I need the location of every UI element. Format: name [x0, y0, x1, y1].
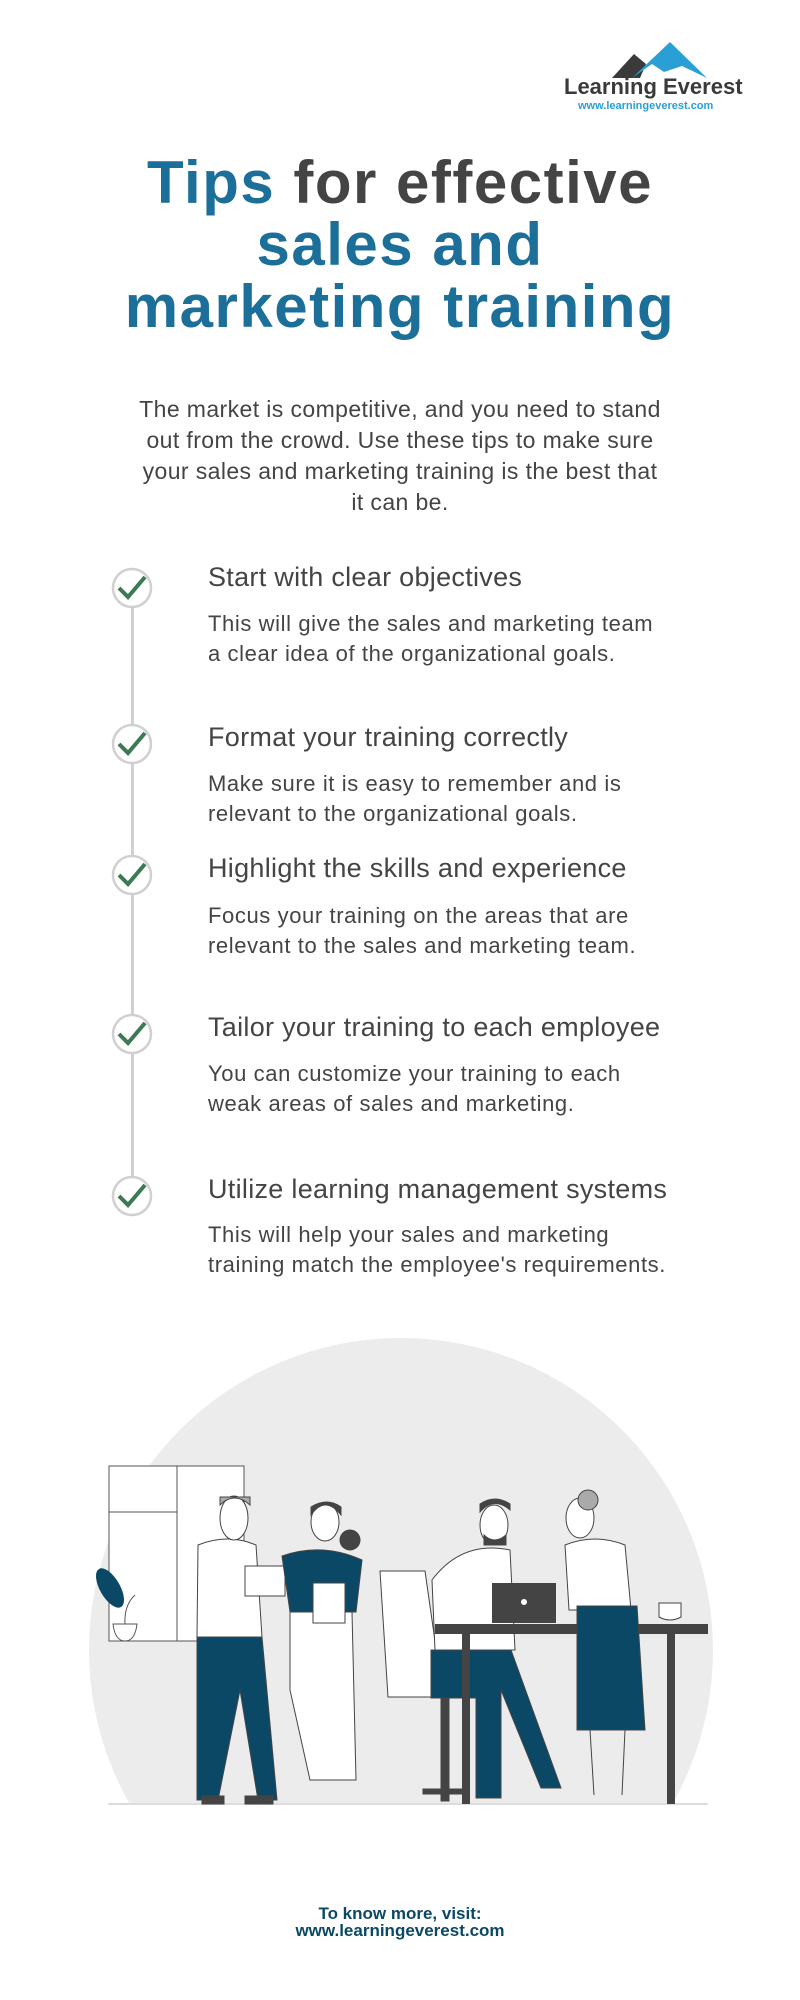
intro text — [139, 396, 661, 515]
description — [208, 903, 636, 958]
woman 2 — [565, 1490, 681, 1795]
timeline line — [131, 608, 134, 1178]
desk and laptop — [435, 1583, 708, 1804]
icon: check — [112, 724, 152, 764]
logo url: www.learningeverest.com — [578, 100, 713, 112]
description — [208, 771, 621, 826]
title — [125, 149, 675, 340]
heading: Start with clear objectives — [208, 562, 522, 592]
tip 5 — [112, 1174, 667, 1277]
plant — [90, 1564, 137, 1641]
description: Make sure it is easy to remember and is — [208, 771, 621, 796]
description — [208, 1222, 666, 1277]
description: weak areas of sales and marketing. — [208, 1091, 574, 1116]
description — [208, 611, 653, 666]
icon: check — [112, 1014, 152, 1054]
tip 3 — [112, 853, 636, 958]
illustration: office team — [89, 1338, 713, 1805]
background circle — [89, 1338, 713, 1803]
icon: check — [112, 1176, 152, 1216]
description: This will help your sales and marketing — [208, 1222, 609, 1247]
description: relevant to the organizational goals. — [208, 801, 578, 826]
tip 4 — [112, 1012, 660, 1116]
footer — [295, 1904, 505, 1940]
description: relevant to the sales and marketing team. — [208, 933, 636, 958]
intro text: it can be. — [351, 489, 449, 515]
heading: Tailor your training to each employee — [208, 1012, 660, 1042]
man 1 — [197, 1496, 285, 1804]
man 2 seated — [431, 1499, 561, 1798]
title: marketing training — [125, 273, 675, 340]
intro text: your sales and marketing training is the best that — [143, 458, 657, 484]
icon: check — [112, 854, 152, 896]
description: training match the employee's requirements. — [208, 1252, 666, 1277]
title: sales and — [256, 211, 544, 278]
icon: mountain — [612, 42, 707, 78]
tip 2 — [112, 722, 621, 826]
intro text: out from the crowd. Use these tips to make sure — [146, 427, 654, 453]
window — [109, 1466, 244, 1641]
logo — [564, 42, 743, 112]
chair — [380, 1571, 463, 1801]
footer: To know more, visit: — [318, 1904, 482, 1923]
title: Tips for effective — [147, 149, 653, 216]
heading: Utilize learning management systems — [208, 1174, 667, 1204]
footer: www.learningeverest.com — [295, 1921, 505, 1940]
description — [208, 1061, 621, 1116]
woman 1 — [282, 1502, 362, 1780]
intro text: The market is competitive, and you need to stand — [139, 396, 661, 422]
tip 1 — [112, 562, 653, 666]
description: a clear idea of the organizational goals. — [208, 641, 615, 666]
description: Focus your training on the areas that are — [208, 903, 629, 928]
heading: Format your training correctly — [208, 722, 568, 752]
logo name: Learning Everest — [564, 74, 743, 99]
description: You can customize your training to each — [208, 1061, 621, 1086]
heading: Highlight the skills and experience — [208, 853, 627, 883]
icon: check — [112, 568, 152, 608]
description: This will give the sales and marketing team — [208, 611, 653, 636]
